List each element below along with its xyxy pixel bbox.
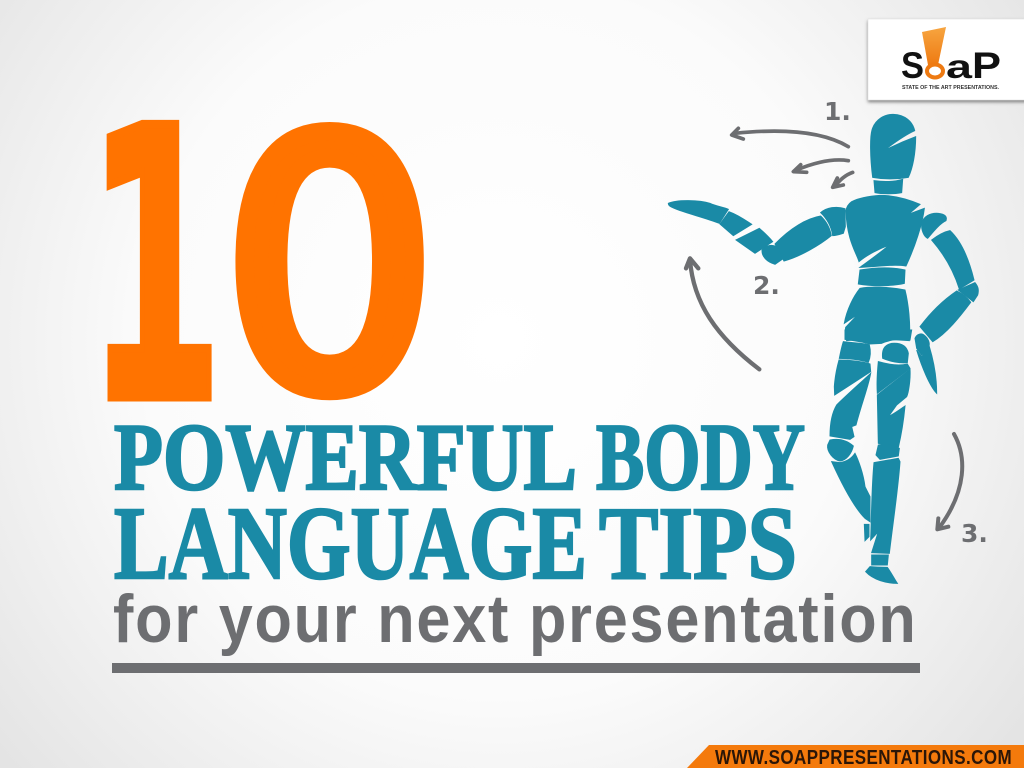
motion arrows bbox=[686, 128, 962, 529]
heading: powerful body language tips: BODY bbox=[596, 404, 805, 510]
heading: powerful body language tips: TIPS bbox=[599, 486, 797, 601]
logo word: P bbox=[972, 45, 1001, 86]
icon: exclamation mark bbox=[922, 27, 946, 65]
step numbers: 2. bbox=[753, 271, 780, 300]
logo word: a bbox=[946, 48, 973, 85]
big number 10: 0 bbox=[222, 68, 437, 468]
arrow: leg swing bbox=[937, 434, 962, 529]
big number 10: 1 bbox=[87, 51, 223, 486]
step numbers bbox=[753, 97, 988, 548]
heading: powerful body language tips: LANGUAGE bbox=[114, 486, 587, 601]
mannequin figure bbox=[668, 114, 978, 583]
logo card bbox=[868, 19, 1024, 100]
underline bar bbox=[112, 663, 920, 673]
step numbers: 3. bbox=[961, 519, 988, 548]
subheading: for your next presentation bbox=[113, 580, 916, 657]
logo word bbox=[901, 45, 1001, 86]
step numbers: 1. bbox=[824, 97, 851, 126]
big number 10 bbox=[87, 51, 437, 486]
logo tagline: STATE OF THE ART PRESENTATIONS. bbox=[902, 85, 999, 91]
heading: powerful body language tips bbox=[114, 404, 805, 601]
logo word: S bbox=[901, 45, 924, 86]
website banner: WWW.SOAPPRESENTATIONS.COM bbox=[715, 746, 1012, 768]
arrows: upper and arm bbox=[686, 128, 853, 369]
heading: powerful body language tips: POWERFUL bbox=[114, 404, 577, 510]
lower body bbox=[828, 330, 937, 583]
upper body bbox=[668, 114, 978, 342]
